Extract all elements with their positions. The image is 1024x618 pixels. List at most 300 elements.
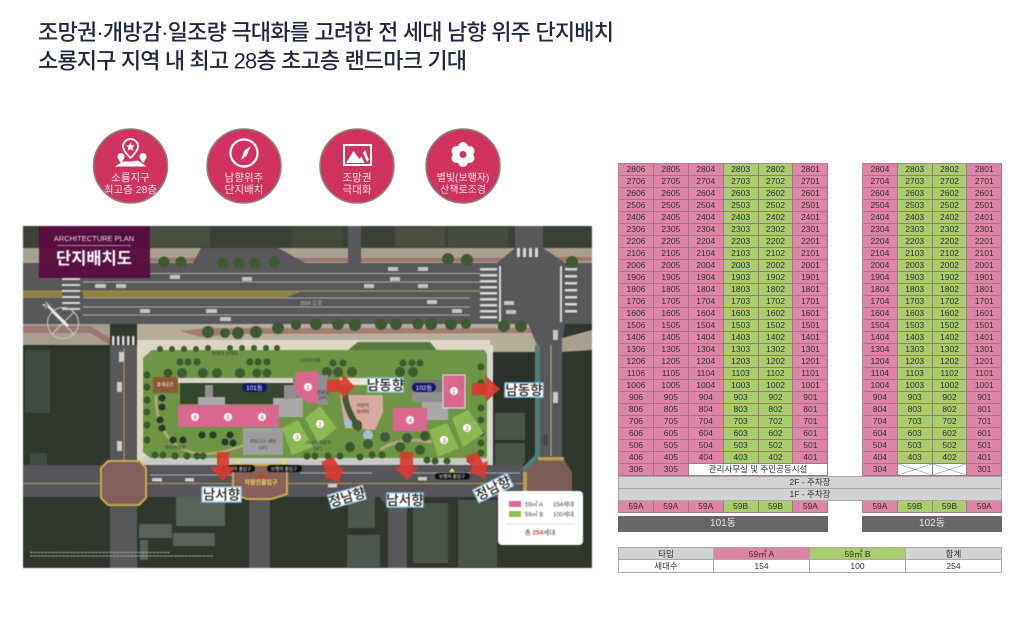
- unit table: building 101: 2202: [766, 236, 785, 246]
- unit table: building 101: 1206: [626, 356, 645, 366]
- unit table: building 101: 2206: [626, 236, 645, 246]
- unit table: building 101: 1402: [766, 332, 785, 342]
- unit table: building 102: 1504: [870, 320, 889, 330]
- unit table: building 101: 701: [803, 416, 817, 426]
- unit table: building 101: 2505: [661, 200, 680, 210]
- title: 조망권·개방감·일조량 극대화를 고려한 전 세대 남향 위주 단지배치: [38, 20, 614, 45]
- entrance pills: [222, 460, 470, 486]
- unit table: building 102: 2604: [870, 188, 889, 198]
- summary table: 59㎡ B: [844, 548, 870, 558]
- unit table: building 102: 1104: [871, 368, 889, 378]
- entrance pills: 보행자 출입구: [225, 466, 251, 472]
- unit table: building 101: 1804: [696, 284, 715, 294]
- unit table: building 101: 1801: [801, 284, 820, 294]
- unit table: building 101: 405: [664, 452, 678, 462]
- unit table: building 101: 902: [768, 392, 783, 402]
- unit table: building 102: 2202: [940, 236, 959, 246]
- unit table: building 101: 1004: [696, 380, 715, 390]
- map title banner: 단지배치도: [56, 249, 132, 268]
- unit table: building 101: 2104: [696, 248, 715, 258]
- unit table: building 101: 2305: [661, 224, 680, 234]
- crosswalks: [62, 248, 577, 345]
- unit table: building 101: 1003: [731, 380, 750, 390]
- unit table: building 102: 902: [942, 392, 957, 402]
- building 101 units: [178, 371, 337, 455]
- unit table: building 102: 2301: [975, 224, 994, 234]
- unit table: building 102: 2801: [975, 164, 994, 174]
- feature icons row: [92, 128, 501, 204]
- building 102 units: 3: [442, 438, 446, 444]
- unit table: building 102: 903: [908, 392, 922, 402]
- summary table: 100: [850, 560, 865, 570]
- bottom road: [23, 465, 523, 568]
- unit table: building 102: 1702: [940, 296, 959, 306]
- unit table: building 101: 1806: [626, 284, 645, 294]
- ground type row: building 102: 59A: [977, 500, 992, 510]
- building 101 units: 3: [295, 434, 299, 442]
- unit table: building 101: 2304: [696, 224, 715, 234]
- facility labels: 방범산책로: [165, 444, 185, 451]
- unit table: building 102: 2401: [975, 212, 994, 222]
- unit table: building 101: 1302: [766, 344, 785, 354]
- unit table: building 101: 506: [629, 440, 643, 450]
- summary table: 세대수: [654, 560, 678, 570]
- entrance pills: 보행자 출입구: [439, 473, 465, 480]
- unit table: building 101: 2605: [661, 188, 680, 198]
- unit table: building 101: 901: [803, 392, 817, 402]
- parking row: 1F: 1F - 주차장: [790, 489, 830, 499]
- fitness center: [243, 428, 283, 455]
- facility labels: 어린이: [357, 402, 369, 409]
- unit table: building 101: 2306: [626, 224, 645, 234]
- feature: maximized view: [320, 129, 394, 203]
- unit table: building 101: 1006: [626, 380, 645, 390]
- unit table: building 101: 2001: [801, 260, 820, 270]
- unit table: building 102: 1501: [975, 320, 994, 330]
- unit table: building 102: 2204: [870, 236, 889, 246]
- unit table: building 102: 1502: [940, 320, 959, 330]
- unit table: building 102: 402: [942, 452, 957, 462]
- unit table: building 101: 2003: [731, 260, 750, 270]
- ground type row: building 102: [862, 500, 1002, 513]
- feature: south-facing: 단지배치: [225, 184, 263, 196]
- compass: N: [41, 300, 52, 310]
- unit table: building 101: 402: [768, 452, 783, 462]
- unit table: building 102: 2002: [940, 260, 959, 270]
- facility labels: 시니어 라운지: [305, 439, 331, 446]
- unit table: building 101: 2106: [626, 248, 645, 258]
- unit table: building 101: 2101: [801, 248, 820, 258]
- ground type row: building 101: 59A: [803, 500, 818, 510]
- unit table: building 101: 2702: [766, 176, 785, 186]
- unit table: building 101: 1405: [661, 332, 680, 342]
- unit table: building 101: 602: [768, 428, 783, 438]
- feature: starlight promenade: [426, 129, 500, 203]
- unit table: building 101: 2604: [696, 188, 715, 198]
- unit table: building 101: 404: [699, 452, 713, 462]
- unit table: building 101: 1502: [766, 320, 785, 330]
- entrance pills: 차량진출입구: [244, 478, 278, 486]
- unit table: building 102: 1101: [975, 368, 993, 378]
- unit table: building 101: 801: [803, 404, 817, 414]
- unit table: building 101: 401: [803, 452, 817, 462]
- unit table: building 102: 304: [873, 464, 887, 474]
- unit table: building 101: 705: [664, 416, 678, 426]
- unit table: building 102: 2304: [870, 224, 889, 234]
- unit table: building 101: 1605: [661, 308, 680, 318]
- unit table: building 102: 2803: [905, 164, 924, 174]
- arrow: south right: [465, 452, 488, 478]
- unit table: building 101: 1203: [731, 356, 750, 366]
- unit table: building 101: 501: [803, 440, 817, 450]
- unit table: building 101: 702: [768, 416, 783, 426]
- unit table: building 101: 2201: [801, 236, 820, 246]
- unit table: building 101: 2704: [696, 176, 715, 186]
- unit table: building 101: 1803: [731, 284, 750, 294]
- unit table: building 102: 1202: [940, 356, 959, 366]
- unit table: building 102: 603: [908, 428, 922, 438]
- unit table: building 102: 501: [977, 440, 991, 450]
- unit table: building 102: 1103: [906, 368, 924, 378]
- unit table: building 102: 2701: [975, 176, 994, 186]
- unit table: building 101: 2706: [626, 176, 645, 186]
- unit table: building 102: 2203: [905, 236, 924, 246]
- unit table: building 102: 2502: [940, 200, 959, 210]
- unit table: building 102: 1002: [940, 380, 959, 390]
- site plan map: [22, 225, 593, 569]
- top blocks: [23, 226, 592, 250]
- unit table: building 101: 2204: [696, 236, 715, 246]
- fitness center: 피트니스 센터: [250, 438, 276, 445]
- direction label: 남동향 right: 남동향: [505, 383, 543, 398]
- unit table: building 102: 904: [873, 392, 887, 402]
- feature: maximized view: 조망권: [343, 172, 371, 184]
- central terrace: [338, 342, 443, 358]
- unit table: building 101: 1505: [661, 320, 680, 330]
- unit table: building 102: 1901: [975, 272, 994, 282]
- facility labels: 스터디카페: [300, 357, 320, 364]
- arrow: southwest left: [210, 452, 235, 481]
- unit table: building 101: 606: [629, 428, 643, 438]
- facility labels: 보행자 산책로: [212, 350, 238, 357]
- building bar: 101: [618, 516, 828, 532]
- building bar: 102: 102동: [919, 518, 945, 529]
- unit table: building 102: 1804: [870, 284, 889, 294]
- unit table: building 101: 2301: [801, 224, 820, 234]
- unit table: building 102: 1803: [905, 284, 924, 294]
- unit table: building 101: 2002: [766, 260, 785, 270]
- unit table: building 102: 2601: [975, 188, 994, 198]
- unit table: building 101: 2004: [696, 260, 715, 270]
- unit table: building 102: 2103: [905, 248, 924, 258]
- unit table: building 102: 2302: [940, 224, 959, 234]
- ground type row: building 102: 59A: [872, 500, 887, 510]
- unit table: building 101: 906: [629, 392, 643, 402]
- unit table: building 101: 603: [734, 428, 748, 438]
- arrow: southeast center: [327, 373, 355, 399]
- building 101 units: 1: [306, 384, 310, 392]
- unit table: building 101: 1305: [661, 344, 680, 354]
- unit table: building 101: 1706: [626, 296, 645, 306]
- facility labels: [157, 350, 369, 451]
- unit table: building 102: [862, 162, 1002, 476]
- unit table: building 101: 1103: [731, 368, 750, 378]
- unit table: building 101: 2105: [661, 248, 680, 258]
- unit table: building 101: 1603: [731, 308, 750, 318]
- unit table: building 101: 1602: [766, 308, 785, 318]
- unit table: building 102: 1404: [870, 332, 889, 342]
- unit table: building 102: 804: [873, 404, 887, 414]
- unit table: building 101: 601: [803, 428, 817, 438]
- unit table: building 102: 1503: [905, 320, 924, 330]
- parking row: 2F: [618, 476, 1002, 488]
- unit table: building 101: 1404: [696, 332, 715, 342]
- unit table: building 101: 802: [768, 404, 783, 414]
- unit table: building 101: 1106: [627, 368, 645, 378]
- unit table: building 101: 1105: [662, 368, 680, 378]
- unit table: building 102: 802: [942, 404, 957, 414]
- unit table: building 102: 703: [908, 416, 922, 426]
- unit table: building 102: 1004: [870, 380, 889, 390]
- unit table: building 102: 1602: [940, 308, 959, 318]
- unit table: building 102: 502: [942, 440, 957, 450]
- feature: starlight promenade: 별빛(보행자): [437, 172, 489, 184]
- unit table: building 101: 2406: [626, 212, 645, 222]
- unit table: building 102: 1902: [940, 272, 959, 282]
- direction label: 정남향 center: 정남향: [327, 485, 367, 510]
- unit table: building 102: 1703: [905, 296, 924, 306]
- unit table: building 102: 1102: [940, 368, 959, 378]
- building bar: 101: 101동: [710, 518, 736, 529]
- unit table: building 102: 2402: [940, 212, 959, 222]
- unit table: building 102: 2102: [940, 248, 959, 258]
- unit table: building 102: 2303: [905, 224, 924, 234]
- unit table: building 102: 1301: [975, 344, 994, 354]
- unit table: building 102: 2702: [940, 176, 959, 186]
- unit table: building 101: 1604: [696, 308, 715, 318]
- unit table: building 102: 1604: [870, 308, 889, 318]
- unit table: building 101: 2501: [801, 200, 820, 210]
- summary table: 254: [946, 560, 961, 570]
- unit table: building 102: 2101: [975, 248, 994, 258]
- unit table: building 101: 1204: [696, 356, 715, 366]
- unit table: building 101: 2806: [626, 164, 645, 174]
- unit table: building 101: 1005: [661, 380, 680, 390]
- unit table: building 102: 1001: [975, 380, 994, 390]
- unit table: building 101: 2205: [661, 236, 680, 246]
- unit table: building 101: 903: [734, 392, 748, 402]
- unit table: building 101: 2503: [731, 200, 750, 210]
- legend: 총 254세대: [525, 528, 555, 536]
- unit table: building 101: 2404: [696, 212, 715, 222]
- unit table: building 101: 1002: [766, 380, 785, 390]
- unit table: building 101: 관리사무실 및 주민공동시설: [709, 464, 807, 474]
- building 102 units: 2: [465, 426, 469, 432]
- unit table: building 101: 1403: [731, 332, 750, 342]
- unit table: building 102: 1304: [870, 344, 889, 354]
- unit table: building 101: 1501: [801, 320, 820, 330]
- direction label: 남서향 center: 남서향: [386, 493, 424, 508]
- unit table: building 101: 2802: [766, 164, 785, 174]
- crossings: [101, 457, 572, 512]
- unit table: building 101: 1306: [626, 344, 645, 354]
- unit table: building 102: 2004: [870, 260, 889, 270]
- unit table: building 102: 503: [908, 440, 922, 450]
- compass: [41, 300, 78, 338]
- ground type row: building 101: 59B: [733, 500, 748, 510]
- building 101 units: 4: [260, 414, 264, 422]
- unit table: building 102: 801: [977, 404, 991, 414]
- parking row: 1F: [618, 488, 1002, 501]
- unit table: building 102: 2201: [975, 236, 994, 246]
- building 101 units: 6: [193, 414, 197, 422]
- unit table: building 101: 2602: [766, 188, 785, 198]
- unit table: building 102: 702: [942, 416, 957, 426]
- building 102 units: 4: [408, 418, 412, 424]
- unit table: building 102: 2503: [905, 200, 924, 210]
- unit table: building 101: 1301: [801, 344, 820, 354]
- unit table: building 101: 1906: [626, 272, 645, 282]
- summary table: 154: [754, 560, 769, 570]
- unit table: building 101: 1606: [626, 308, 645, 318]
- feature: highest 28 floors: [94, 129, 168, 203]
- unit table: building 102: 1704: [870, 296, 889, 306]
- unit table: building 102: 1204: [870, 356, 889, 366]
- unit table: building 101: 1102: [766, 368, 785, 378]
- unit table: building 101: 1202: [766, 356, 785, 366]
- unit table: building 101: 1702: [766, 296, 785, 306]
- unit table: building 101: 1704: [696, 296, 715, 306]
- unit table: building 101: 1504: [696, 320, 715, 330]
- unit table: building 102: 1801: [975, 284, 994, 294]
- unit table: building 102: 2802: [940, 164, 959, 174]
- unit table: building 102: 1402: [940, 332, 959, 342]
- dong labels: 102동: [416, 384, 432, 392]
- unit table: building 101: 2203: [731, 236, 750, 246]
- building 101 units: 2: [318, 422, 322, 428]
- unit table: building 101: 2801: [801, 164, 820, 174]
- facility labels: (1F): [319, 395, 328, 400]
- unit table: building 101: 1703: [731, 296, 750, 306]
- unit table: building 101: 704: [699, 416, 713, 426]
- building 102 units: [393, 375, 484, 457]
- title: 소룡지구 지역 내 최고 28층 초고층 랜드마크 기대: [38, 48, 467, 74]
- unit table: building 101: 2103: [731, 248, 750, 258]
- unit table: building 101: 2601: [801, 188, 820, 198]
- bottom building blocks: [139, 497, 497, 567]
- feature: starlight promenade: 산책로조경: [440, 183, 486, 196]
- unit table: building 101: 503: [734, 440, 748, 450]
- dong labels: [242, 383, 436, 392]
- unit table: building 101: 2401: [801, 212, 820, 222]
- unit table: building 102: 1203: [905, 356, 924, 366]
- legend: 59㎡ A: [525, 500, 543, 508]
- arrow: southwest center: [394, 452, 419, 480]
- unit table: building 101: 1101: [801, 368, 820, 378]
- ground type row: building 101: 59B: [768, 500, 783, 510]
- unit table: building 101: 1901: [801, 272, 820, 282]
- unit table: building 101: 305: [664, 464, 678, 474]
- building 102 units: 1: [452, 388, 456, 396]
- unit table: building 101: 2701: [801, 176, 820, 186]
- ground type row: building 101: 59A: [698, 500, 713, 510]
- summary table: 합계: [946, 548, 961, 558]
- unit table: building 101: 306: [629, 464, 643, 474]
- legend: [498, 491, 583, 545]
- unit table: building 102: 604: [873, 428, 887, 438]
- unit table: building 101: 2405: [661, 212, 680, 222]
- dark blocks right: [493, 345, 562, 473]
- unit table: building 101: 2705: [661, 176, 680, 186]
- dong labels: 101동: [246, 384, 263, 392]
- title: [38, 20, 614, 74]
- facility labels: 휴게공간: [157, 381, 173, 388]
- unit table: building 101: 2303: [731, 224, 750, 234]
- unit table: building 101: 1506: [626, 320, 645, 330]
- map title banner: ARCHITECTURE PLAN: [54, 234, 134, 243]
- unit table: building 101: 803: [734, 404, 748, 414]
- unit table: building 102: 1302: [940, 344, 959, 354]
- summary table: 59㎡ A: [749, 548, 774, 558]
- unit table: building 102: 1903: [905, 272, 924, 282]
- legend: 154세대: [553, 500, 574, 508]
- unit table: building 101: 406: [629, 452, 643, 462]
- unit table: building 102: 803: [908, 404, 922, 414]
- top sidewalk: [23, 248, 592, 264]
- unit table: building 101: 1904: [696, 272, 715, 282]
- direction label: 남동향 center: 남동향: [367, 378, 404, 393]
- unit table: building 101: 1201: [801, 356, 820, 366]
- unit table: building 102: 2003: [905, 260, 924, 270]
- fine print: [30, 552, 213, 556]
- unit table: building 101: 1205: [661, 356, 680, 366]
- unit table: building 102: 301: [977, 464, 991, 474]
- unit table: building 101: 1805: [661, 284, 680, 294]
- left roads: [25, 345, 137, 568]
- feature: south-facing: [207, 129, 281, 203]
- unit table: building 101: 1601: [801, 308, 820, 318]
- direction label: 정남향 right: 정남향: [473, 474, 513, 503]
- unit table: building 102: 401: [977, 452, 991, 462]
- unit table: building 102: 1401: [975, 332, 994, 342]
- unit table: building 101: 604: [699, 428, 713, 438]
- unit table: building 101: 2502: [766, 200, 785, 210]
- unit table: building 101: 1802: [766, 284, 785, 294]
- unit table: building 101: 2102: [766, 248, 785, 258]
- main road: [23, 226, 592, 345]
- parking row: 2F: 2F - 주차장: [790, 476, 830, 486]
- unit table: building 101: 1401: [801, 332, 820, 342]
- map title banner: [39, 226, 150, 278]
- unit table: building 101: 905: [664, 392, 678, 402]
- unit table: building 101: 1705: [661, 296, 680, 306]
- unit table: building 101: 2504: [696, 200, 715, 210]
- unit table: building 102: 2504: [870, 200, 889, 210]
- gray roofs: [198, 375, 448, 420]
- unit table: building 101: 2302: [766, 224, 785, 234]
- unit table: building 101: 804: [699, 404, 713, 414]
- fitness center: (1F): [259, 445, 268, 450]
- unit table: building 102: 1603: [905, 308, 924, 318]
- facility labels: 경로당: [317, 389, 329, 395]
- unit table: building 101: 2803: [731, 164, 750, 174]
- road label: 35M 도로: [300, 300, 322, 307]
- unit table: building 101: 2805: [661, 164, 680, 174]
- unit table: building 101: 1001: [801, 380, 820, 390]
- unit table: building 101: 806: [629, 404, 643, 414]
- feature: highest 28 floors: 최고층 28층: [104, 184, 157, 196]
- entrance pills: 보행자 출입구: [271, 466, 297, 472]
